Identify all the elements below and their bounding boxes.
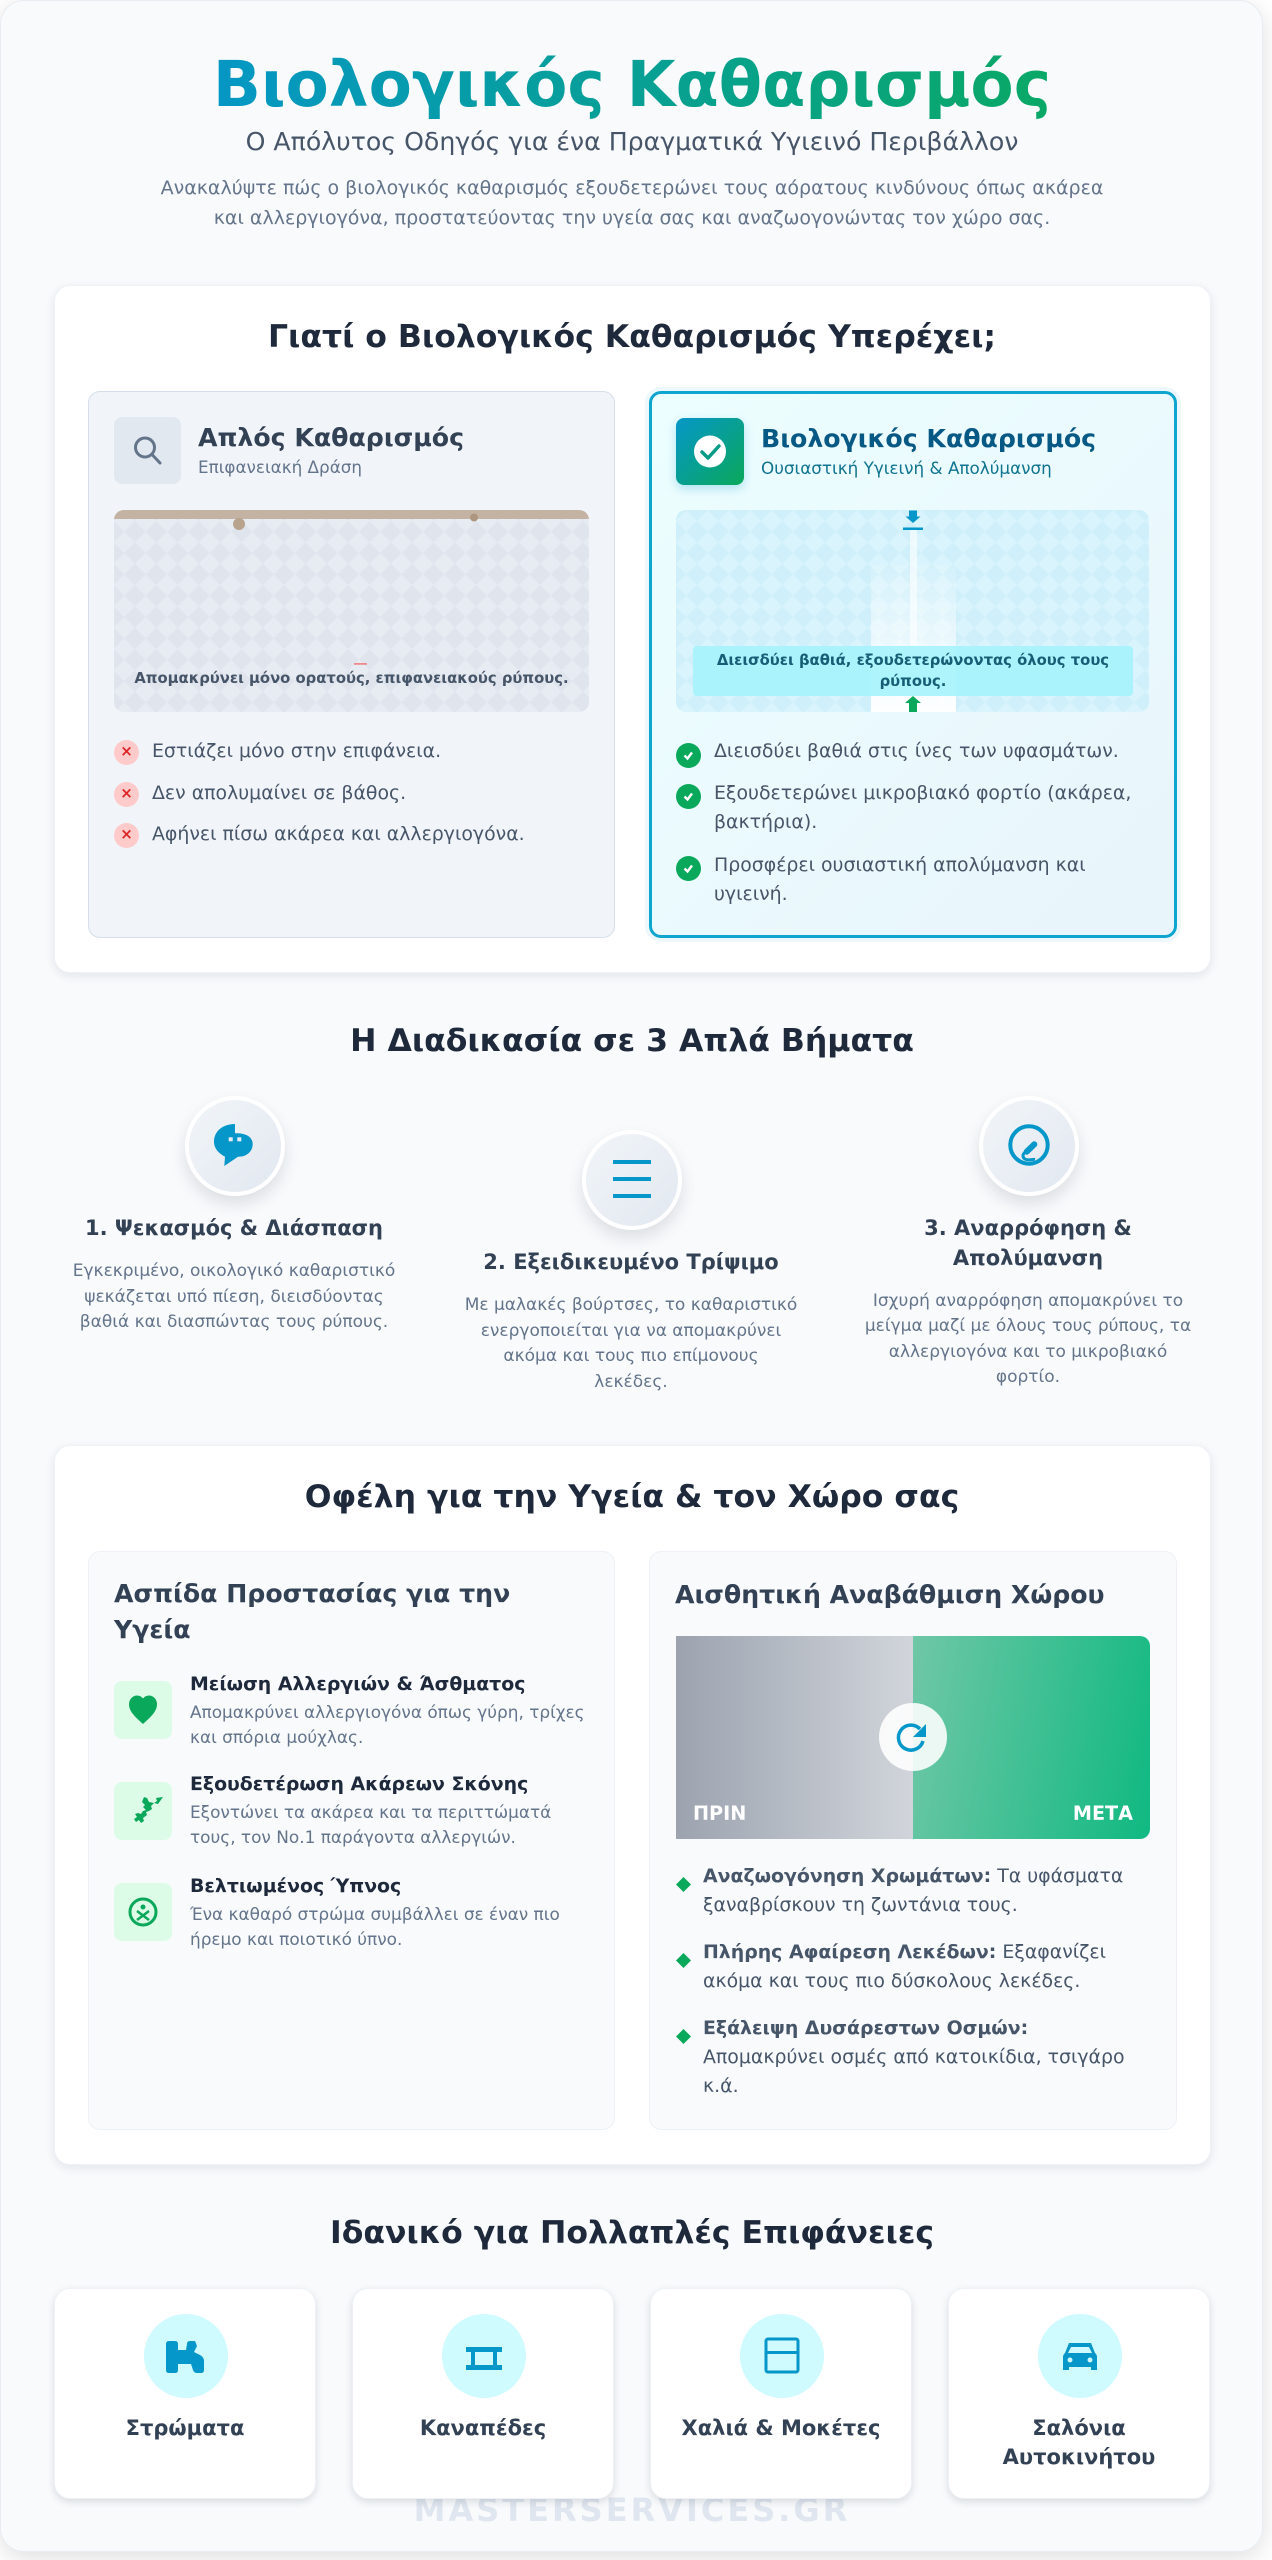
heading: benefits: Οφέλη για την Υγεία & τον Χώρο σας — [305, 1479, 959, 1515]
list: biological cleaning benefits — [676, 740, 1131, 905]
panel: simple cleaning — [88, 391, 615, 938]
step 2 description — [465, 1295, 797, 1392]
step 3 title: 3. Αναρρόφηση & — [924, 1216, 1132, 1240]
item title: Εξουδετέρωση Ακάρεων Σκόνης — [190, 1773, 528, 1795]
label before: ΠΡΙΝ — [693, 1802, 746, 1825]
benefit 2 — [676, 782, 1131, 833]
illustration caption: ρύπους. — [880, 672, 946, 690]
step 3 description: φορτίο. — [996, 1367, 1060, 1387]
benefit: colours — [676, 1865, 1123, 1916]
step 3 title: Απολύμανση — [953, 1246, 1103, 1270]
benefit: odours: κ.ά. — [703, 2075, 739, 2097]
benefit: odours: Απομακρύνει οσμές από κατοικίδια, τσιγάρο — [703, 2046, 1125, 2068]
illustration caption: Διεισδύει βαθιά, εξουδετερώνοντας όλους τους — [717, 652, 1109, 668]
label — [1002, 2416, 1155, 2469]
benefit 1: Διεισδύει βαθιά στις ίνες των υφασμάτων. — [714, 740, 1119, 762]
health heading — [114, 1579, 510, 1644]
heading: process: Η Διαδικασία σε 3 Απλά Βήματα — [350, 1023, 914, 1059]
step 1 description: βαθιά και διασπώντας τους ρύπους. — [80, 1312, 388, 1332]
label: Αυτοκινήτου — [1003, 2445, 1155, 2469]
label after: ΜΕΤΑ — [1073, 1802, 1133, 1825]
drawback 3: Αφήνει πίσω ακάρεα και αλλεργιογόνα. — [152, 822, 525, 844]
step 1 description — [73, 1261, 395, 1332]
step 3 — [865, 1100, 1191, 1387]
watermark: MASTERSERVICES.GR — [414, 2491, 850, 2529]
item description — [190, 1904, 560, 1949]
header — [160, 48, 1103, 229]
drawback 1: × — [120, 742, 133, 760]
icon: sofa — [442, 2314, 526, 2398]
before and after visual — [676, 1636, 1150, 1839]
step 1 — [73, 1100, 395, 1332]
step 2 title: 2. Εξειδικευμένο Τρίψιμο — [483, 1250, 779, 1274]
benefit 2: βακτήρια). — [714, 811, 817, 833]
benefit 3: Προσφέρει ουσιαστική απολύμανση και — [714, 854, 1086, 876]
step 1 description: Εγκεκριμένο, οικολογικό καθαριστικό — [73, 1261, 395, 1281]
step 1 title: 1. Ψεκασμός & Διάσπαση — [85, 1216, 383, 1240]
step 3 description: μείγμα μαζί με όλους τους ρύπους, τα — [865, 1316, 1191, 1336]
label: Στρώματα — [126, 2416, 244, 2440]
icon: brush lines — [582, 1130, 682, 1230]
benefit 3: υγιεινή. — [714, 883, 788, 905]
panel: benefits — [54, 1445, 1211, 2165]
icon: check badge — [676, 418, 744, 485]
label: Καναπέδες — [420, 2416, 546, 2440]
benefit: odours: Εξάλειψη Δυσάρεστων Οσμών: — [703, 2017, 1028, 2039]
title: Βιολογικός Καθαρισμός — [213, 48, 1051, 121]
after side — [913, 1636, 1150, 1839]
icon: carpet — [740, 2314, 824, 2398]
benefit: stains — [676, 1941, 1106, 1992]
heading: why superior: Γιατί ο Βιολογικός Καθαρισμός Υπερέχει; — [268, 319, 996, 355]
label: Σαλόνια — [1032, 2416, 1126, 2440]
panel: aesthetic upgrade — [649, 1551, 1177, 2130]
intro text: και αλλεργιογόνα, προστατεύοντας την υγεία σας και αναζωογονώντας τον χώρο σας. — [214, 207, 1050, 229]
icon: mattress — [144, 2314, 228, 2398]
item description: ήρεμο και ποιοτικό ύπνο. — [190, 1929, 402, 1949]
biological cleaning subheading: Ουσιαστική Υγιεινή & Απολύμανση — [761, 458, 1052, 478]
item description: Εξοντώνει τα ακάρεα και τα περιττώματά — [190, 1802, 551, 1822]
panel: health shield — [88, 1551, 615, 2130]
subtitle: Ο Απόλυτος Οδηγός για ένα Πραγματικά Υγιεινό Περιβάλλον — [246, 127, 1018, 156]
icon: magnifier — [114, 417, 181, 484]
health item 2 — [114, 1773, 551, 1847]
drawback 2: Δεν απολυμαίνει σε βάθος. — [152, 782, 406, 804]
illustration: deep penetration — [676, 510, 1149, 712]
icon: dust mite — [114, 1782, 172, 1840]
heading: surfaces: Ιδανικό για Πολλαπλές Επιφάνειες — [330, 2215, 934, 2251]
icon: heart — [114, 1681, 172, 1739]
label: Χαλιά & Μοκέτες — [682, 2416, 880, 2440]
health heading: Ασπίδα Προστασίας για την — [114, 1579, 510, 1608]
item description: τους, τον Νο.1 παράγοντα αλλεργιών. — [190, 1827, 516, 1847]
health heading: Υγεία — [114, 1615, 191, 1644]
step 2 — [465, 1134, 797, 1392]
item description: Απομακρύνει αλλεργιογόνα όπως γύρη, τρίχες — [190, 1702, 585, 1722]
illustration caption — [693, 646, 1133, 696]
benefit: colours: Αναζωογόνηση Χρωμάτων: Τα υφάσματα — [703, 1865, 1123, 1887]
step 2 description: ενεργοποιείται για να απομακρύνει — [481, 1320, 781, 1340]
drawback 2: × — [120, 784, 133, 802]
item description: Ένα καθαρό στρώμα συμβάλλει σε έναν πιο — [190, 1904, 560, 1924]
item description — [190, 1702, 585, 1747]
step 1 description: ψεκάζεται υπό πίεση, διεισδύοντας — [84, 1286, 384, 1306]
benefit: stains: ακόμα και τους πιο δύσκολους λεκέδες. — [703, 1970, 1080, 1992]
illustration: surface dirt only — [114, 510, 589, 712]
panel: biological cleaning — [649, 391, 1177, 938]
step 2 description: λεκέδες. — [594, 1372, 668, 1392]
list: aesthetic benefits — [676, 1865, 1125, 2097]
item description — [190, 1802, 551, 1847]
simple cleaning subheading: Επιφανειακή Δράση — [198, 457, 362, 477]
icon: car — [1038, 2314, 1122, 2398]
drawback 1: Εστιάζει μόνο στην επιφάνεια. — [152, 740, 441, 762]
panel: why biological cleaning is superior — [54, 285, 1211, 973]
item title: Μείωση Αλλεργιών & Άσθματος — [190, 1673, 525, 1695]
step 3 description: Ισχυρή αναρρόφηση απομακρύνει το — [873, 1290, 1183, 1310]
list: simple cleaning drawbacks — [114, 740, 525, 848]
health item 1 — [114, 1673, 585, 1747]
icon: spray bubble — [185, 1096, 285, 1196]
benefit: colours: ξαναβρίσκουν τη ζωντάνια τους. — [703, 1894, 1018, 1916]
icon: sleep face — [114, 1883, 172, 1941]
intro text: Ανακαλύψτε πώς ο βιολογικός καθαρισμός εξουδετερώνει τους αόρατους κινδύνους όπως ακάρεα — [161, 177, 1103, 199]
surface card: sofas — [352, 2288, 614, 2499]
icon: refresh button — [879, 1703, 947, 1771]
before side — [676, 1636, 913, 1839]
simple cleaning heading: Απλός Καθαρισμός — [198, 423, 464, 452]
surface card: mattresses — [54, 2288, 316, 2499]
drawback 3: × — [120, 825, 133, 843]
benefit: odours — [676, 2017, 1125, 2097]
health item 3 — [114, 1875, 560, 1949]
step 3 description — [865, 1290, 1191, 1387]
surface card: carpets — [650, 2288, 912, 2499]
item title: Βελτιωμένος Ύπνος — [190, 1875, 401, 1897]
aesthetic heading: Αισθητική Αναβάθμιση Χώρου — [675, 1580, 1105, 1609]
icon: extraction circle — [979, 1096, 1079, 1196]
step 2 description: Με μαλακές βούρτσες, το καθαριστικό — [465, 1295, 797, 1315]
item description: και σπόρια μούχλας. — [190, 1727, 363, 1747]
surface card: car interiors — [948, 2288, 1210, 2499]
benefit: stains: Πλήρης Αφαίρεση Λεκέδων: Εξαφανίζει — [703, 1941, 1106, 1963]
step 2 description: ακόμα και τους πιο επίμονους — [503, 1346, 759, 1366]
intro text — [160, 177, 1103, 229]
illustration caption: Απομακρύνει μόνο ορατούς, επιφανειακούς ρύπους. — [134, 670, 569, 687]
biological cleaning heading: Βιολογικός Καθαρισμός — [761, 424, 1096, 453]
step 3 title — [924, 1216, 1132, 1270]
benefit 3 — [676, 854, 1086, 905]
benefit 2: Εξουδετερώνει μικροβιακό φορτίο (ακάρεα, — [714, 782, 1131, 804]
step 3 description: αλλεργιογόνα και το μικροβιακό — [889, 1342, 1167, 1362]
